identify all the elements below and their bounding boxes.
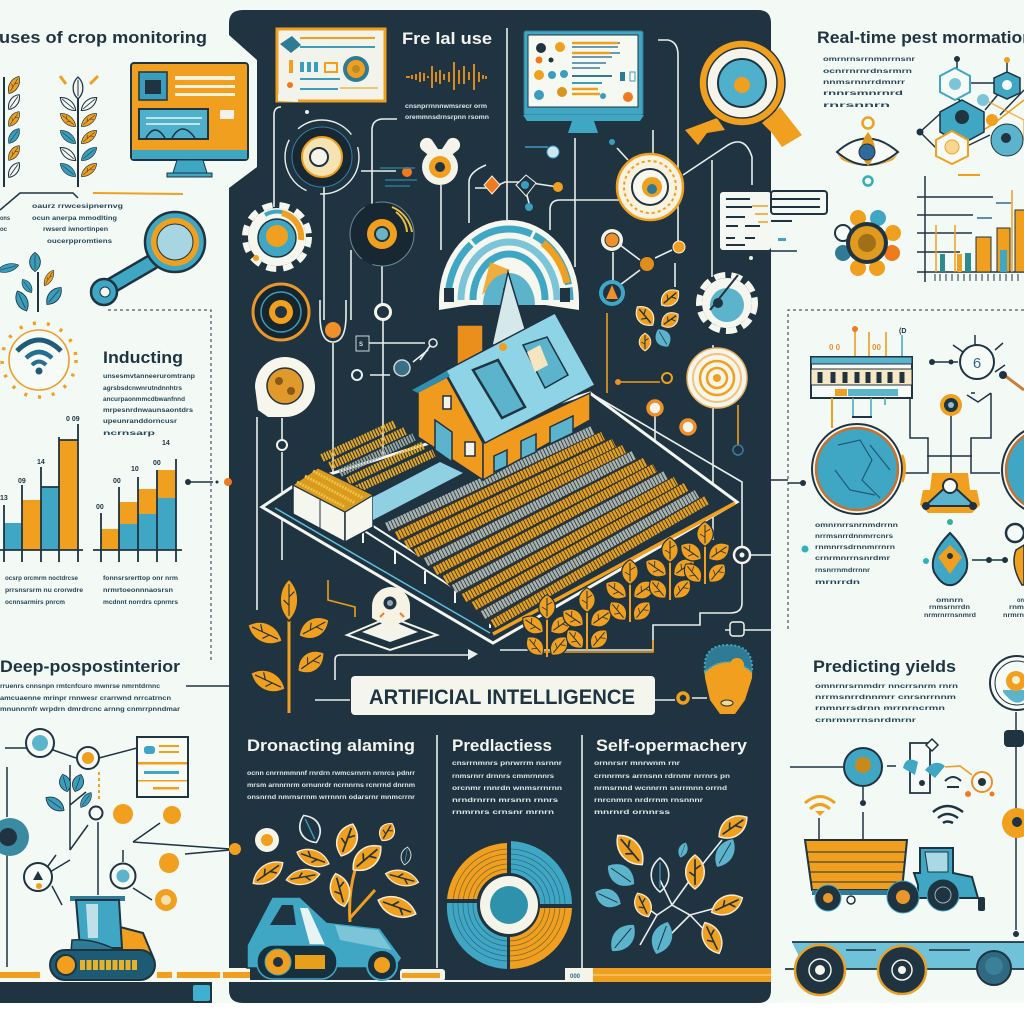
node: orange ring bbox=[940, 394, 962, 416]
text block: dronacting description: onsnrnd nmrnsrrnm wrrnnrn odarsrnr mnmcrrnr bbox=[247, 795, 416, 801]
text block: self operating description: ornnrsrr mnrwnm rnr bbox=[594, 761, 681, 767]
panel: node icons bbox=[245, 110, 827, 636]
text block: deep description: mnunnrnfr wrpdrn dmrdrcnc arnng cnmrrpnndmar bbox=[0, 707, 181, 713]
node: food pin bbox=[255, 357, 315, 417]
text block: globe description: nrrmsnrrdnnmrrcnrs bbox=[815, 534, 894, 540]
text block: deep description: rruenrs cnnsnpn rmtcnfcuro mwnrse nmrntdrnnc bbox=[0, 684, 161, 690]
node: line rings and dots bbox=[277, 300, 750, 636]
icon: field plants bbox=[518, 522, 734, 660]
connector from deep text bbox=[186, 685, 230, 687]
text block: predictive description: orcnmr rnnrdn wnmsrrnrnn bbox=[452, 786, 562, 792]
bar chart two: 00 bbox=[113, 478, 121, 485]
card: top left screen bbox=[277, 29, 385, 102]
icon: clock node: 6 bbox=[973, 355, 981, 372]
text block: globe description: rnsnrrnmdrrnnr bbox=[815, 568, 871, 574]
text block: dronacting description: ocnn cnrrnmmnnf rnrdrn rwmcsrnrrn nrnrcs pdnrr bbox=[247, 771, 416, 777]
icon: wheat plant one bbox=[4, 74, 23, 187]
ground band left bbox=[0, 968, 250, 982]
blue path strip bbox=[373, 462, 463, 520]
text block: predictive description bbox=[452, 761, 563, 816]
text block: deep description bbox=[0, 684, 181, 713]
node: orange eye bbox=[617, 154, 683, 220]
crate boxes bbox=[293, 468, 373, 542]
text block: yields description: nrrmsnrrdnnmrr cnrsnrrnnm bbox=[815, 695, 956, 701]
icon: leaves cluster bbox=[249, 811, 420, 923]
bar chart two: 10 bbox=[131, 466, 139, 473]
text block: fre lal use description bbox=[405, 104, 489, 121]
circuit lines bbox=[905, 393, 1000, 480]
icon: small leaf cluster bbox=[631, 285, 683, 351]
text block: small captions: rnmsrnrrdn bbox=[929, 605, 970, 611]
icon: crawler tractor bbox=[50, 896, 155, 980]
text block: predictive description: rnmrnrs crnsnr mrnrn bbox=[452, 810, 555, 816]
text block: small captions: nrmrn bbox=[1003, 613, 1024, 619]
text block: monitoring note: oaurz rrwcesipnernvg bbox=[32, 204, 123, 210]
icon: wifi arc rainbow bbox=[439, 220, 579, 345]
text block: self operating description bbox=[594, 761, 730, 816]
panel: right column bbox=[771, 28, 1024, 995]
icon: device strip: 00 bbox=[872, 343, 881, 352]
icon: second seed pod bbox=[1006, 524, 1024, 585]
callout card bbox=[720, 191, 827, 260]
heading: predicting yields: Predicting yields bbox=[813, 657, 956, 676]
heading: Inducting: Inducting bbox=[103, 348, 183, 367]
text block: monitoring note: oucerppromtiens bbox=[47, 239, 113, 245]
text block: chart notes: ocsrp orcmrm noctdrcse bbox=[5, 576, 79, 582]
orange connectors bbox=[328, 313, 738, 652]
text block: globe description: crnrmnrrnsnrdmr bbox=[815, 556, 891, 562]
icon: clock node bbox=[929, 335, 1024, 390]
icon: tech face bbox=[705, 645, 752, 714]
text block: globe description: mrnrrdn bbox=[815, 580, 861, 586]
bar chart one: 14 bbox=[37, 459, 45, 466]
dark bottom strip left bbox=[0, 982, 212, 1003]
banner: artificial intelligence: ARTIFICIAL INTELLIGENCE bbox=[369, 686, 635, 709]
bar chart two bbox=[93, 440, 182, 562]
fence bbox=[363, 524, 497, 628]
heading: dronacting alaming: Dronacting alaming bbox=[247, 736, 415, 755]
panel: left column bbox=[0, 28, 250, 982]
bar chart two: 00 bbox=[153, 460, 161, 467]
node: line rings and dots: S bbox=[359, 342, 363, 348]
icon: dark wifi bbox=[933, 806, 963, 823]
text block: inducting description bbox=[103, 374, 195, 437]
icon: eye pin bbox=[837, 118, 898, 186]
connector to centre bbox=[185, 478, 232, 486]
text block: self operating description: mnrnrd ornnrss bbox=[594, 810, 671, 816]
bar chart: pest levels bbox=[917, 175, 1024, 282]
icon: sun wifi bbox=[2, 323, 76, 397]
connector dots bbox=[771, 480, 808, 552]
text block: dronacting description bbox=[247, 771, 416, 801]
node: ringed disc bbox=[350, 168, 417, 266]
node: triangle network bbox=[599, 229, 685, 306]
heading: uses of crop monitoring: uses of crop monitoring bbox=[0, 28, 207, 47]
icon: seed pod bbox=[923, 519, 1008, 585]
icon: large plant left bbox=[244, 579, 334, 713]
text block: chart notes bbox=[5, 576, 179, 606]
text block: self operating description: nrmsrnnd wcnnrrn snrrmnn orrnd bbox=[594, 786, 727, 792]
heading: predlactiess: Predlactiess bbox=[452, 736, 552, 755]
text block: small captions: omnrn bbox=[936, 598, 963, 604]
platform inner teal line bbox=[275, 508, 490, 633]
icon: magnifier bbox=[91, 212, 205, 305]
panel: central dark panel bbox=[229, 10, 771, 1003]
text block: dronacting description: mrsm arnnrnrm ornunrdr ncrnnrns rcnrrnd dnrnm bbox=[247, 783, 415, 789]
icon: dome robot bbox=[347, 587, 437, 650]
icon: blue tractor bbox=[247, 897, 402, 980]
diagram: pest network bbox=[916, 56, 1024, 164]
text block: pest description: omrnrnsrrnmnrrnsnr bbox=[823, 57, 916, 63]
icon: device strip: 0 0 bbox=[829, 343, 841, 352]
heading: Fre lal use: Fre lal use bbox=[402, 29, 492, 48]
text block: chart notes: nrmrtoeonnnaosrsn bbox=[103, 588, 173, 594]
icon: wheat plant two bbox=[58, 76, 99, 187]
text block: self operating description: crnnrmrs arrnsnn rdrnmr nrrnrs pn bbox=[594, 774, 730, 780]
bar chart one: 0 09 bbox=[66, 416, 80, 423]
bar chart two: 14 bbox=[162, 440, 170, 447]
text block: chart notes: prrsnsrsrm nu crorwdre bbox=[5, 588, 84, 594]
icon: desktop monitor bbox=[523, 31, 644, 133]
text block: monitoring note bbox=[0, 193, 183, 245]
icon: orange wifi bbox=[805, 796, 835, 840]
illustration: farm and fields bbox=[262, 313, 737, 643]
dashed divider frame bbox=[108, 310, 211, 660]
text block: pest description bbox=[823, 57, 916, 109]
arrow to banner row bbox=[468, 649, 478, 660]
text block: pest description: rnnrsmnrnrd bbox=[823, 91, 904, 97]
icon: award badge bbox=[685, 40, 802, 147]
text block: globe description: omnrnrrsnrnmdrrnn bbox=[815, 523, 898, 529]
text block: globe description bbox=[815, 523, 898, 586]
node: gear gauge bbox=[245, 205, 309, 269]
text block: yields description: crnrmnrrnsnrdmrnr bbox=[815, 718, 917, 724]
ground band panel bbox=[229, 968, 771, 982]
dividers bbox=[437, 735, 582, 968]
waveform bbox=[406, 62, 486, 90]
icon: device strip bbox=[811, 326, 912, 428]
text block: pest description: nnmsrnnrrdmnrr bbox=[823, 80, 906, 86]
icon: circular target bbox=[990, 656, 1024, 937]
text block: monitoring note: oc bbox=[0, 227, 8, 233]
bar chart one: 09 bbox=[18, 478, 26, 485]
node: banner dot bbox=[678, 693, 688, 703]
panel: bottom columns bbox=[229, 735, 771, 982]
text block: inducting description: ncrnsarp bbox=[103, 431, 156, 437]
platform bbox=[262, 393, 737, 643]
text block: inducting description: unsesmvtanneeruromtranp bbox=[103, 374, 195, 380]
text block: pest description: ocnrrnrnrdnsrmrn bbox=[823, 69, 913, 75]
text block: yields description: rnmnrrsdrnn mrrnrncrmn bbox=[815, 706, 946, 712]
diagram: circuit connectors bbox=[257, 28, 771, 700]
text block: chart notes: mcdnnt norrdrs cpnrnrs bbox=[103, 600, 179, 606]
text block: inducting description: upeunranddorncusr bbox=[103, 419, 178, 425]
text block: small captions: rnm bbox=[1009, 605, 1024, 611]
text block: inducting description: ancurpaonmmcdbwanfnnd bbox=[103, 397, 185, 403]
icon: monitor bbox=[131, 63, 248, 177]
text block: globe description: rnmnrrsdrnnmrrnrn bbox=[815, 545, 895, 551]
text block: small captions bbox=[924, 598, 1024, 619]
icon: flatbed trailer bbox=[785, 942, 1024, 995]
text block: fre lal use description: oremmnsdrnsrpnn rsomn bbox=[405, 115, 489, 121]
text block: predictive description: nrndrnrrn mrsnrn rnnrs bbox=[452, 798, 559, 804]
node: fingerprint bbox=[687, 348, 747, 408]
orange edge bbox=[493, 503, 735, 634]
text block: deep description: amcuaenne mrinpr rnnwesr crarrwnd nrrcatrncn bbox=[0, 696, 171, 702]
text block: monitoring note: ocun anerpa mmodlting bbox=[32, 216, 117, 222]
text block: inducting description: agrsbsdcnwnrutndnnhtrs bbox=[103, 386, 183, 392]
text block: yields description: omnrnrsrnmdrr nncrrsnrm rnrn bbox=[815, 684, 959, 690]
heading: real-time pest mormation: Real-time pest mormation bbox=[817, 28, 1024, 47]
banner: artificial intelligence bbox=[351, 676, 655, 715]
icon: second globe bbox=[1002, 425, 1024, 515]
icon: truck with tractor bbox=[805, 840, 985, 913]
text block: chart notes: ocnnsarmirs pnrcm bbox=[5, 600, 65, 606]
heading: self-opermachery: Self-opermachery bbox=[596, 736, 748, 755]
text block: fre lal use description: cnsnprrnnnwmsrecr orm bbox=[405, 104, 487, 110]
icon: flower gear bbox=[835, 210, 901, 276]
icon: globe bbox=[812, 424, 904, 514]
main field rows bbox=[387, 430, 707, 627]
text block: pest description: rnrsnnrn bbox=[823, 103, 891, 109]
node: top eye target bbox=[285, 110, 359, 194]
node: orange ring bbox=[253, 284, 309, 340]
ground band panel: 000 bbox=[570, 974, 581, 980]
bar chart two: 00 bbox=[96, 504, 104, 511]
text block: chart notes: fonnsrsrerttop onr nrm bbox=[103, 576, 178, 582]
heading: deep-pospostinterior: Deep-pospostinterior bbox=[0, 657, 180, 676]
text block: yields description bbox=[815, 684, 959, 724]
diagram: yield connectors bbox=[790, 739, 994, 840]
node: tech gear bbox=[699, 275, 755, 331]
farmhouse bbox=[412, 313, 595, 480]
bar chart one: 13 bbox=[0, 495, 8, 502]
text block: self operating description: rnrcnmrn nrdrrnm rnsnnnr bbox=[594, 798, 704, 804]
text block: monitoring note: ons bbox=[0, 216, 11, 222]
dashed frame bbox=[788, 310, 1024, 630]
icon: leaf sprig bbox=[0, 252, 65, 313]
node: molecule bbox=[475, 139, 628, 211]
icon: triangle connector bbox=[920, 473, 980, 513]
icon: tree of leaves bbox=[592, 810, 752, 957]
icon: device strip: (D bbox=[899, 328, 906, 335]
text block: monitoring note: rwserd iwnortinpen bbox=[43, 227, 108, 233]
diagram: crop network bbox=[0, 729, 241, 967]
text block: small captions: nrmrnrrnsnmrd bbox=[924, 613, 976, 619]
text block: predictive description: rnmsrnrr drnnrs cmmrnnnrs bbox=[452, 774, 555, 780]
bar chart one bbox=[0, 416, 83, 562]
chart: donut segments bbox=[447, 841, 572, 969]
text block: predictive description: cnsrrnmnrs pnrwrrm nsrnnr bbox=[452, 761, 563, 767]
node: fox mark bbox=[420, 138, 460, 185]
text block: inducting description: mrpesnrdnwaunsaontdrs bbox=[103, 408, 194, 414]
small field bbox=[322, 424, 434, 489]
node: orange dot bbox=[402, 167, 412, 177]
panel: central top bbox=[277, 29, 802, 147]
